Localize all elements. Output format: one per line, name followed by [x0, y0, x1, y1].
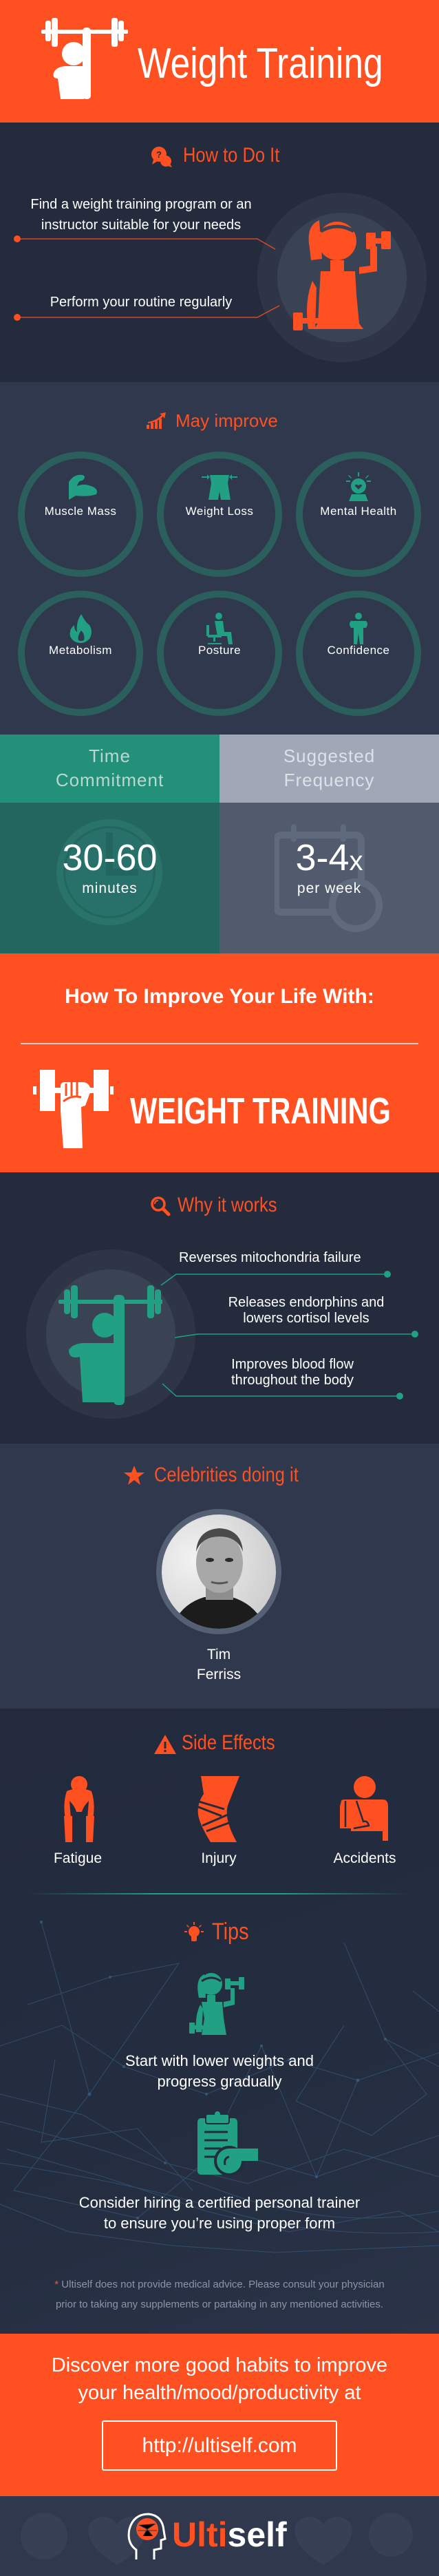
effect: accidents: [333, 1776, 396, 1866]
heading: how to do it: How to Do It: [183, 144, 279, 167]
icon: fist with dumbbell: [33, 1070, 114, 1148]
cta text: [52, 2354, 387, 2404]
circle illustration: lifter: [26, 1249, 195, 1419]
photo: Tim Ferriss: [156, 1509, 281, 1634]
footer logo bar: [0, 2496, 439, 2576]
celebrity name: Tim: [207, 1647, 231, 1662]
reason 3: Improves blood flow throughout the body: [231, 1357, 354, 1388]
tip 2: [79, 2111, 360, 2232]
frequency header: [220, 735, 439, 803]
icon: faint clock: [56, 819, 162, 925]
logo: ultiself: [128, 2513, 287, 2559]
effect: injury: Injury: [201, 1850, 237, 1866]
heading: tips: [184, 1919, 249, 1945]
heading: celebrities doing it: Celebrities doing it: [154, 1464, 299, 1486]
time header: Time: [89, 746, 131, 766]
url box: [102, 2420, 337, 2471]
icon: chat bubbles: [151, 147, 172, 167]
disclaimer: prior to taking any supplements or partaking in any mentioned activities.: [56, 2299, 383, 2310]
effect: accidents: Accidents: [333, 1850, 396, 1866]
step 1 text: Find a weight training program or an instructor suitable for your needs: [30, 197, 252, 233]
circle illustration: woman with dumbbells: [257, 193, 427, 362]
benefit: confidence: [296, 591, 421, 716]
effect: fatigue: Fatigue: [54, 1850, 102, 1866]
header panel: [0, 0, 439, 123]
benefit: muscle mass: [18, 452, 143, 577]
benefit: posture: [157, 591, 282, 716]
benefit: metabolism: [18, 591, 143, 716]
effect: fatigue: [54, 1776, 102, 1866]
value: 3-4x per week: 3-4x: [295, 837, 363, 878]
title: Weight Training: [138, 40, 383, 87]
tip 1 text: Start with lower weights and: [125, 2052, 314, 2069]
icon: magnifier: [151, 1196, 171, 1216]
panel: suggested frequency: per week: [297, 880, 361, 896]
panel: celebrities: [0, 1444, 439, 1709]
benefit: confidence: Confidence: [327, 644, 389, 657]
benefit: muscle mass: Muscle Mass: [45, 505, 116, 518]
panel: may improve: [0, 382, 439, 735]
icon: warning triangle: [154, 1735, 176, 1754]
time header: [0, 735, 220, 803]
time header: Commitment: [56, 770, 164, 790]
panel: suggested frequency: [220, 735, 439, 953]
reason 2: Releases endorphins and lowers cortisol levels: [228, 1295, 384, 1326]
tip 1 text: [125, 2052, 314, 2090]
frequency header: Frequency: [284, 770, 374, 790]
footer call to action: [0, 2334, 439, 2496]
background network pattern: [0, 1921, 439, 2252]
icon: star: [124, 1466, 144, 1485]
tip 2 text: [79, 2194, 360, 2232]
icon: chart up: [147, 412, 166, 429]
step 2 connector: [14, 305, 279, 321]
step 2 text: Perform your routine regularly: [50, 295, 232, 310]
tip 2 text: to ensure you’re using proper form: [104, 2215, 335, 2232]
benefit: metabolism: Metabolism: [49, 644, 112, 657]
disclaimer: * Ultiself does not provide medical advice. Please consult your physician: [54, 2279, 385, 2290]
panel: why it works: [0, 1172, 439, 1444]
faint background icons: [0, 2496, 439, 2576]
disclaimer: [54, 2279, 385, 2310]
reason 1: Reverses mitochondria failure: [179, 1250, 361, 1265]
heading: why it works: Why it works: [178, 1194, 277, 1216]
benefit: weight loss: Weight Loss: [186, 505, 253, 518]
icon: brain head: [128, 2513, 167, 2559]
panel: time commitment: [0, 735, 220, 953]
icon: faint calendar: [275, 824, 383, 932]
icon: woman with dumbbell: [189, 1973, 244, 2035]
banner heading: How To Improve Your Life With:: [65, 985, 374, 1008]
tip 1 text: progress gradually: [157, 2073, 281, 2090]
benefit: weight loss: [157, 452, 282, 577]
tip 1: [125, 1973, 314, 2090]
value: 30-60 minutes: 30-60: [62, 837, 158, 878]
cta text: your health/mood/productivity at: [78, 2382, 361, 2404]
reason 1 connector: [161, 1271, 391, 1286]
effect: injury: [198, 1776, 239, 1866]
step 1 connector: [14, 235, 275, 250]
frequency header: Suggested: [283, 746, 375, 766]
panel: side effects and tips: [0, 1709, 439, 2334]
icon: chat bubbles: ?: [156, 149, 162, 160]
url box: http://ultiself.com: [142, 2434, 297, 2457]
celebrity name: Ferriss: [197, 1667, 241, 1682]
celebrity name: [197, 1647, 241, 1682]
banner title: weight training: WEIGHT TRAINING: [130, 1090, 391, 1132]
benefit: mental health: Mental Health: [320, 505, 397, 518]
reason 2 connector: [175, 1331, 418, 1338]
heading: may improve: May improve: [175, 410, 278, 431]
heading: side effects: Side Effects: [182, 1731, 275, 1754]
icon: clipboard and whistle: [197, 2111, 258, 2175]
icon: light bulb: [184, 1922, 204, 1941]
benefit: mental health: [296, 452, 421, 577]
panel: time commitment: minutes: [82, 880, 138, 896]
benefit: posture: Posture: [198, 644, 241, 657]
reason 3 connector: [162, 1384, 403, 1400]
heading: tips: Tips: [212, 1919, 249, 1945]
banner: how to improve your life: [0, 953, 439, 1172]
tip 2 text: Consider hiring a certified personal trainer: [79, 2194, 360, 2211]
panel: how to do it: [0, 123, 439, 382]
logo: ultiself: Ultiself: [172, 2515, 287, 2554]
cta text: Discover more good habits to improve: [52, 2354, 387, 2376]
divider: [28, 1893, 411, 1894]
icon: weightlifter: [41, 18, 128, 99]
